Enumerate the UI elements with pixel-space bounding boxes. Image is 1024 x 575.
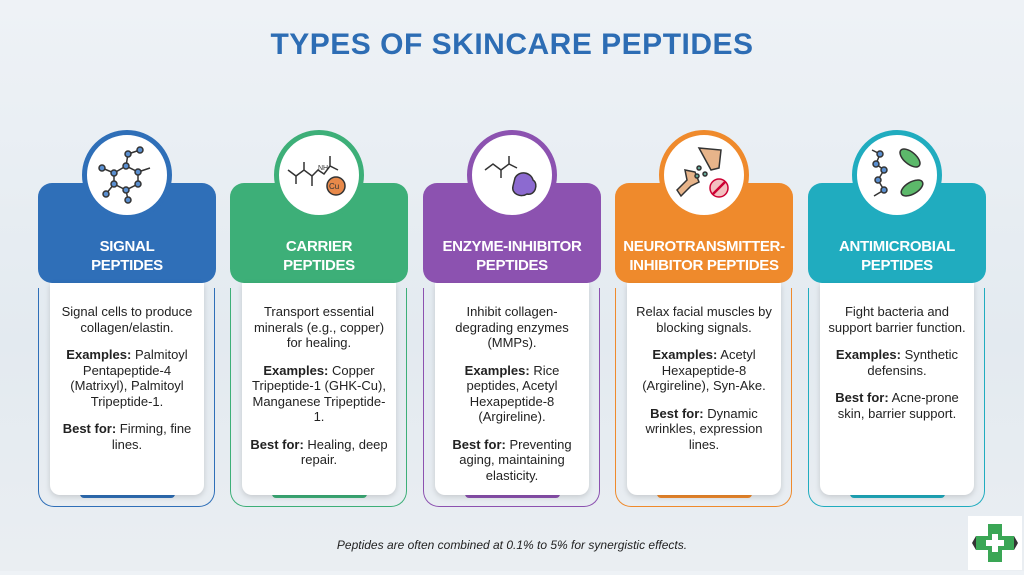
heading: NEUROTRANSMITTER- [623, 238, 785, 255]
text block: Inhibit collagen-degrading enzymes (MMPs). [455, 304, 569, 350]
text block: Examples: Rice peptides, Acetyl Hexapeptide-8 (Argireline). [465, 362, 559, 424]
icon: copper peptide: Cu [329, 182, 339, 191]
panel: carrier peptides [230, 130, 408, 507]
heading: PEPTIDES [476, 257, 548, 274]
text block [627, 283, 781, 495]
heading: INHIBITOR PEPTIDES [629, 257, 779, 274]
heading [442, 238, 582, 274]
panel: signal peptides [38, 130, 216, 507]
text block [820, 283, 974, 495]
text block: Best for: Preventing aging, maintaining elasticity. [452, 436, 572, 482]
panel: enzyme-inhibitor peptides [423, 130, 601, 507]
heading [623, 238, 785, 274]
heading: ANTIMICROBIAL [839, 238, 955, 255]
heading: ENZYME-INHIBITOR [442, 238, 582, 255]
footer note: Peptides are often combined at 0.1% to 5% for synergistic effects. [337, 538, 687, 552]
text block [435, 283, 589, 495]
text block: Examples: Synthetic defensins. [836, 347, 958, 378]
heading [839, 238, 955, 274]
text block: Best for: Dynamic wrinkles, expression lines. [645, 406, 763, 452]
heading: PEPTIDES [861, 257, 933, 274]
icon: enzyme [467, 130, 557, 220]
heading: PEPTIDES [283, 257, 355, 274]
heading: PEPTIDES [91, 257, 163, 274]
panel: neurotransmitter-inhibitor peptides [615, 130, 793, 507]
text block: Examples: Palmitoyl Pentapeptide-4 (Matrixyl), Palmitoyl Tripeptide-1. [66, 347, 188, 408]
icon: logo [968, 516, 1022, 570]
text block: Examples: Copper Tripeptide-1 (GHK-Cu), Manganese Tripeptide-1. [252, 362, 386, 424]
panel: antimicrobial peptides [808, 130, 986, 507]
text block [242, 283, 396, 495]
title: TYPES OF SKINCARE PEPTIDES [270, 28, 754, 61]
icon: molecule [82, 130, 172, 220]
text block [50, 283, 204, 495]
heading: SIGNAL [100, 238, 154, 255]
icon: bacteria [852, 130, 942, 220]
icon: synapse block [659, 130, 749, 220]
text block: Signal cells to produce collagen/elastin. [62, 304, 192, 334]
text block: Relax facial muscles by blocking signals. [636, 304, 772, 334]
heading [283, 238, 355, 274]
text block: Best for: Healing, deep repair. [250, 436, 388, 467]
icon: copper peptide: NH [318, 165, 328, 172]
icon: copper peptide [274, 130, 364, 220]
heading [91, 238, 163, 274]
text block: Best for: Firming, fine lines. [63, 421, 191, 452]
text block: Transport essential minerals (e.g., copper) for healing. [254, 304, 384, 350]
text block: Best for: Acne-prone skin, barrier support. [835, 390, 959, 420]
text block: Fight bacteria and support barrier function. [828, 304, 966, 334]
text block: Examples: Acetyl Hexapeptide-8 (Argireline), Syn-Ake. [642, 347, 766, 393]
heading: CARRIER [286, 238, 352, 255]
